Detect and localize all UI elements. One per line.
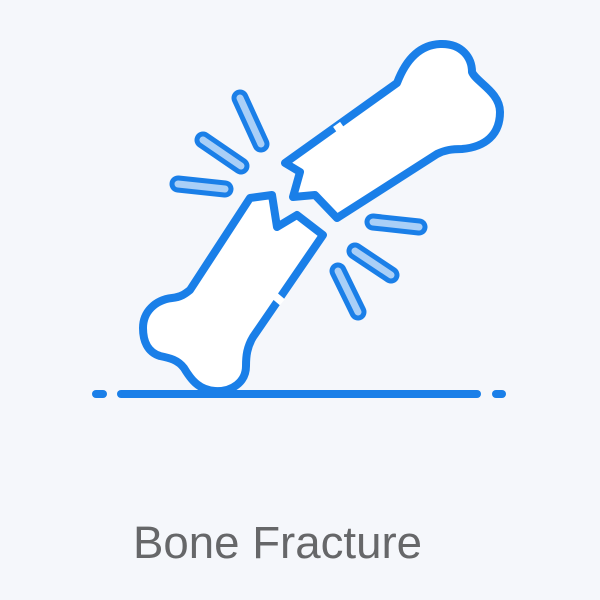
gap in upper edge — [336, 126, 343, 131]
lower bone fragment — [143, 195, 323, 391]
impact rays — [178, 98, 419, 312]
gap in lower edge — [276, 296, 281, 302]
ground line — [96, 390, 502, 398]
upper bone fragment — [285, 44, 500, 218]
caption: Bone Fracture — [133, 517, 422, 568]
